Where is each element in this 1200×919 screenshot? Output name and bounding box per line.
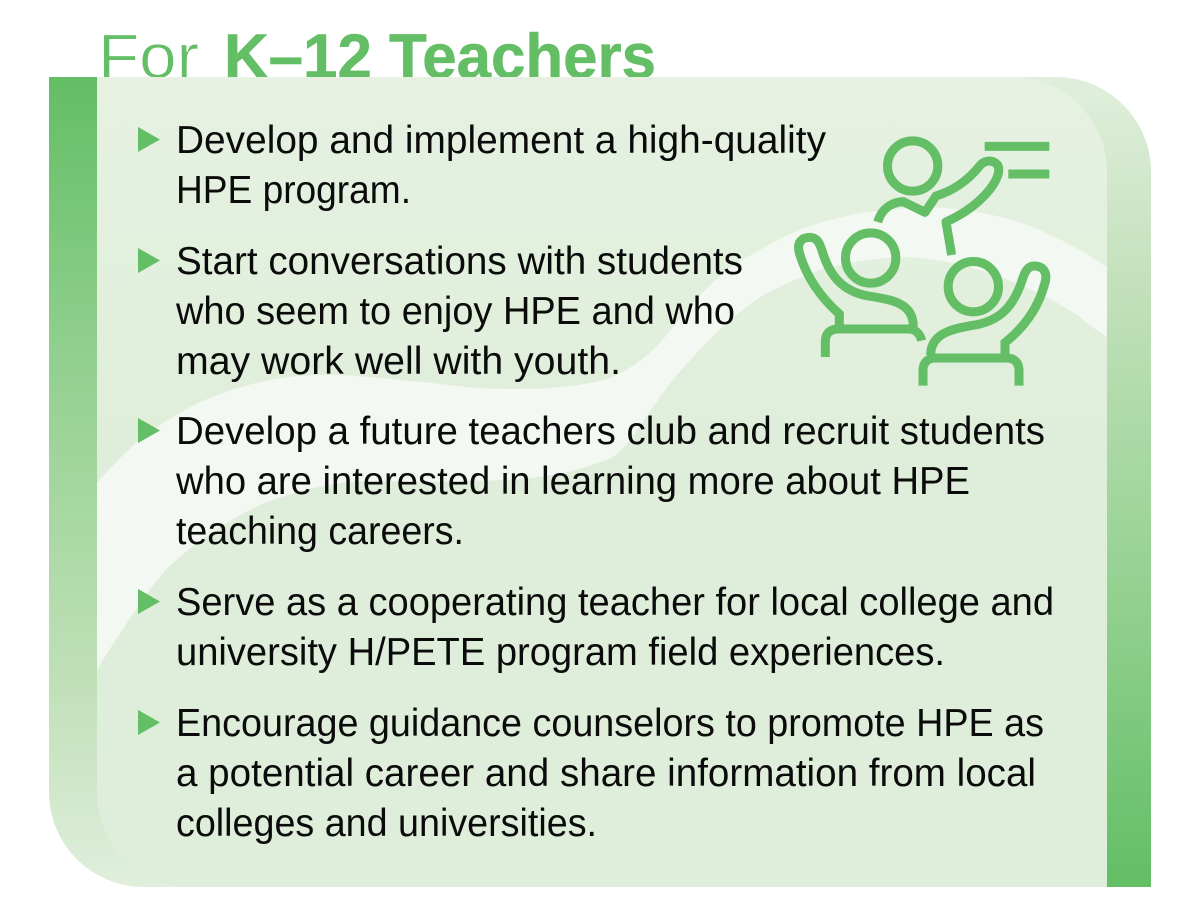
bullet 4 (138, 581, 1054, 674)
text block (175, 240, 743, 383)
text block (176, 119, 827, 212)
text block: teaching careers. (176, 510, 464, 553)
left student head (845, 233, 896, 283)
icon: arrow bullet (138, 127, 160, 152)
right student head (948, 261, 998, 312)
teacher head (887, 141, 938, 191)
text block: HPE program. (176, 169, 411, 212)
bullet 5 (138, 702, 1044, 845)
text block (176, 581, 1054, 674)
text block: a potential career and share information from local (176, 752, 1036, 795)
text block: who are interested in learning more about HPE (175, 460, 970, 503)
icon: arrow bullet (138, 248, 160, 273)
icon: arrow bullet (138, 418, 160, 443)
teacher body and pointing arm (878, 161, 999, 255)
board lines (985, 146, 1049, 174)
text block: may work well with youth. (176, 340, 621, 383)
text block: Develop and implement a high-quality (176, 119, 827, 162)
right student desk (923, 358, 1019, 386)
text block: colleges and universities. (176, 802, 597, 845)
text block: Develop a future teachers club and recruit students (176, 410, 1045, 453)
panel: inner card (97, 77, 1107, 887)
text block: Serve as a cooperating teacher for local college and (176, 581, 1054, 624)
bullet 2 (138, 240, 743, 383)
icon: arrow bullet (138, 710, 160, 735)
text block (176, 702, 1044, 845)
text block: who seem to enjoy HPE and who (175, 290, 735, 333)
decorative white wave (97, 207, 1107, 670)
left student arm (799, 237, 913, 327)
panel: left outer band (49, 77, 600, 887)
text block: Encourage guidance counselors to promote HPE as (176, 702, 1044, 745)
text block (175, 410, 1045, 553)
left student desk (825, 329, 922, 357)
bullet 3 (138, 410, 1045, 553)
icon: teacher and raised-hand students (799, 141, 1049, 386)
text block: Start conversations with students (176, 240, 743, 283)
title: K–12 Teachers (224, 22, 656, 92)
text block: university H/PETE program field experiences. (176, 631, 945, 674)
bullet 1 (138, 119, 827, 212)
panel: right outer band (600, 77, 1151, 887)
icon: arrow bullet (138, 589, 160, 614)
right student arm (931, 266, 1046, 355)
title: For (98, 22, 199, 92)
